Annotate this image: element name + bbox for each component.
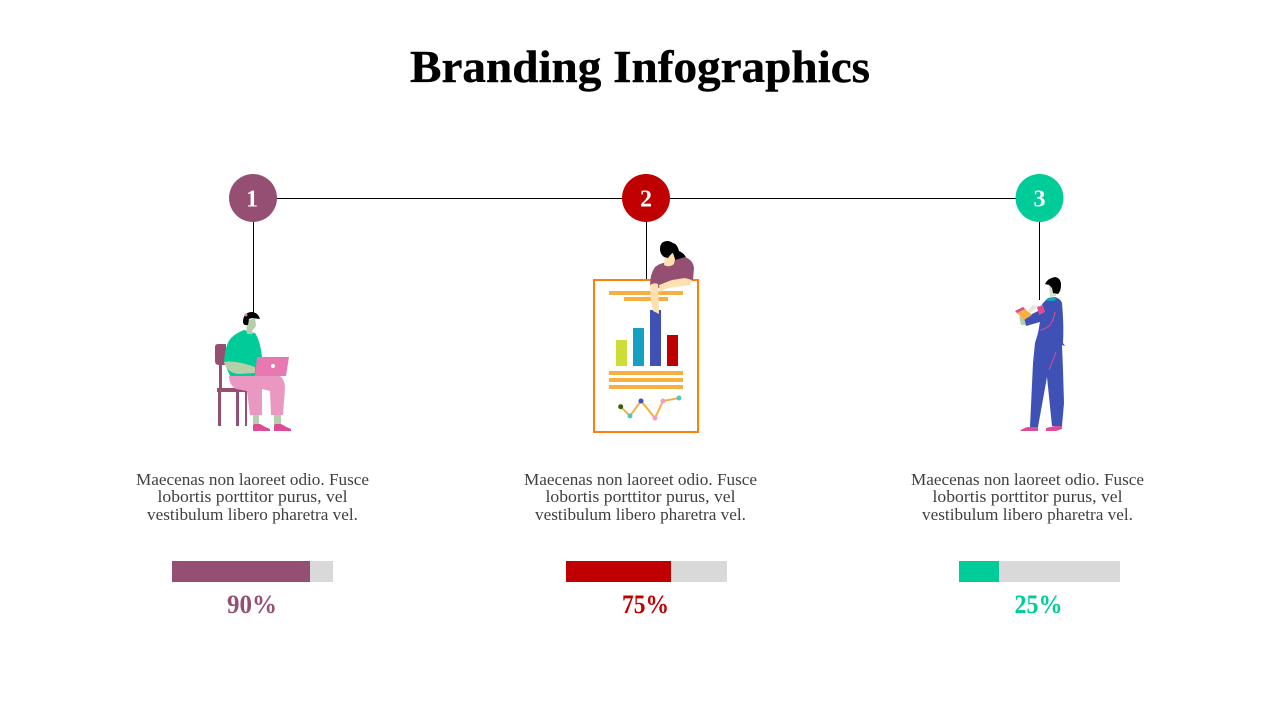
panel: step 3 <box>911 174 1144 619</box>
icon: standing person with notebook <box>1015 277 1065 431</box>
description 2: lobortis porttitor purus, vel <box>546 487 736 506</box>
step badge 2: 2 <box>640 186 652 212</box>
description 3: lobortis porttitor purus, vel <box>932 487 1123 506</box>
description 3 <box>911 470 1144 524</box>
step badge 2 <box>622 174 670 222</box>
timeline connector <box>253 198 1040 316</box>
icon: person on laptop <box>215 312 291 431</box>
value 75%: 75% <box>622 590 669 619</box>
panel: step 2 <box>524 174 757 619</box>
step badge 1 <box>229 174 277 222</box>
description 1: lobortis porttitor purus, vel <box>158 487 348 506</box>
description 1: Maecenas non laoreet odio. Fusce <box>136 470 369 489</box>
description 3: Maecenas non laoreet odio. Fusce <box>911 470 1144 489</box>
description 3: vestibulum libero pharetra vel. <box>922 505 1133 524</box>
step badge 3 <box>1016 174 1064 222</box>
value 25%: 25% <box>1014 590 1062 619</box>
progress bar 25% <box>959 561 1120 582</box>
description 1: vestibulum libero pharetra vel. <box>147 505 358 524</box>
panel: step 1 <box>136 174 369 619</box>
step badge 1: 1 <box>246 186 258 212</box>
progress bar 75% <box>566 561 727 582</box>
description 1 <box>136 470 369 524</box>
value 90%: 90% <box>227 590 277 619</box>
description 2: vestibulum libero pharetra vel. <box>535 505 746 524</box>
progress bar 90% <box>172 561 333 582</box>
description 2: Maecenas non laoreet odio. Fusce <box>524 470 757 489</box>
icon: report with person <box>594 241 698 432</box>
title: Branding Infographics <box>410 41 870 92</box>
description 2 <box>524 470 757 524</box>
step badge 3: 3 <box>1034 186 1046 212</box>
